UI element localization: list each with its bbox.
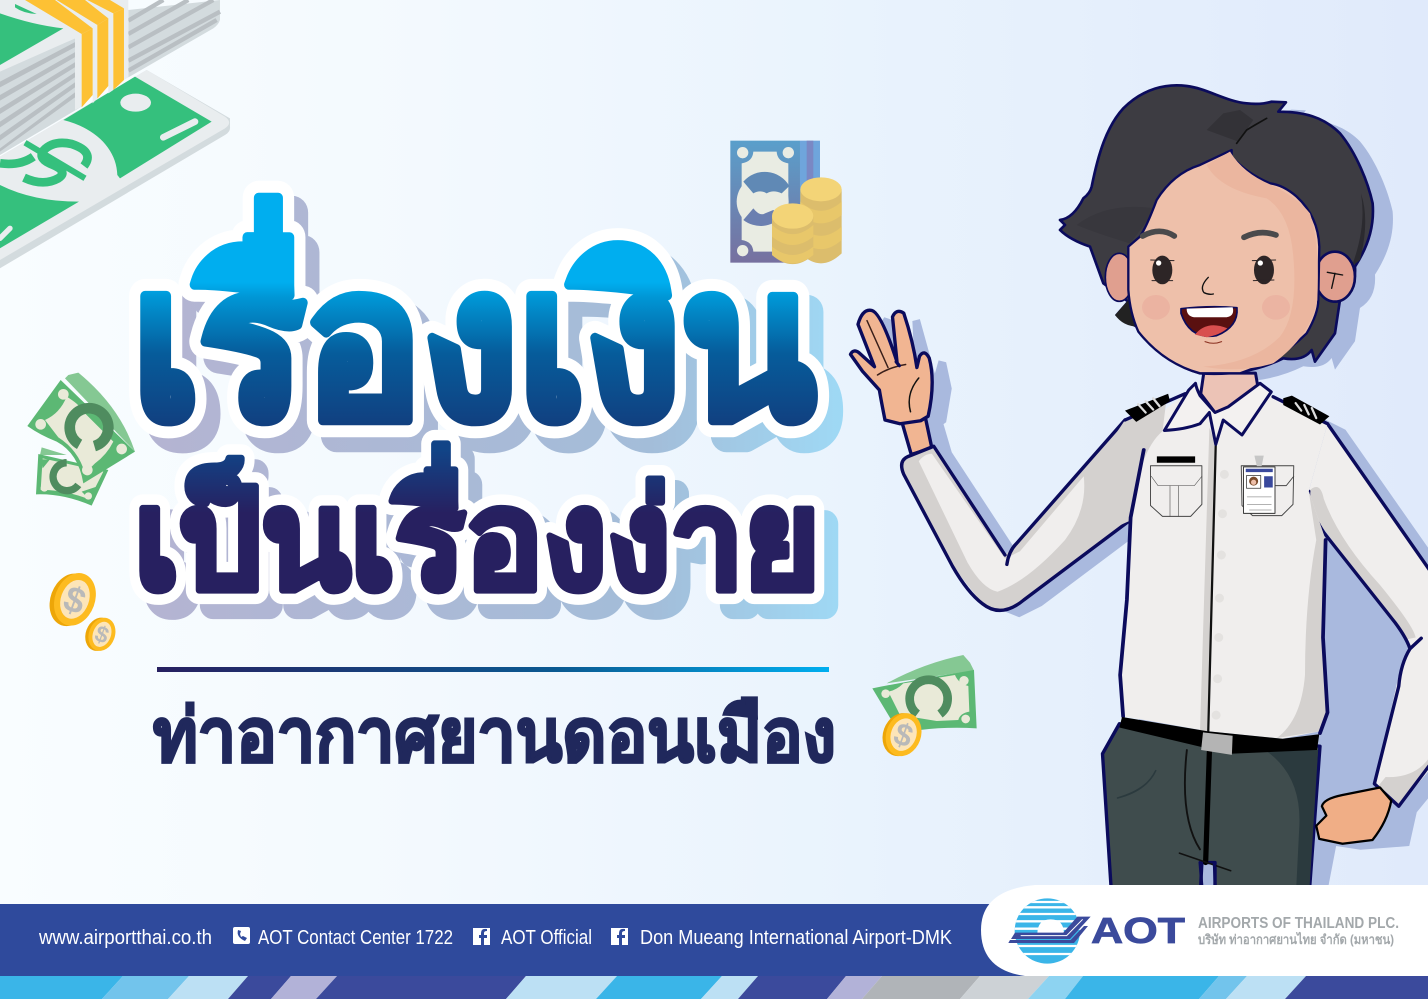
footer bar — [0, 904, 1428, 976]
left ear — [1105, 253, 1133, 301]
character shadow — [869, 93, 1428, 895]
upper banknote — [27, 373, 135, 483]
right arm and sleeve — [1309, 424, 1428, 806]
illustration: large gold coin — [42, 566, 103, 633]
neck — [1201, 373, 1258, 428]
illustration: green banknotes left — [27, 373, 135, 506]
illustration: small gold coin — [81, 613, 120, 656]
icon: facebook — [473, 928, 490, 945]
company name English: AIRPORTS OF THAILAND PLC. — [1198, 915, 1399, 932]
epaulettes — [1125, 394, 1329, 424]
nose — [1202, 277, 1213, 294]
AOT wordmark: AOT — [1091, 910, 1185, 951]
eyes — [1151, 256, 1276, 284]
illustration: AOT staff character — [850, 85, 1428, 900]
forehead shading — [1203, 152, 1318, 369]
logo panel — [981, 885, 1428, 976]
hair — [1060, 85, 1373, 374]
illustration: blue banknote with gold coins — [730, 141, 842, 264]
icon: phone — [233, 927, 250, 944]
banknote lying flat — [0, 70, 230, 268]
title line 2: เป็นเรื่องง่าย — [134, 443, 820, 618]
subtitle: ท่าอากาศยานดอนเมือง — [153, 694, 836, 777]
collar — [1164, 383, 1271, 444]
left pocket — [1150, 466, 1202, 516]
divider rule — [157, 667, 829, 672]
title line 2: เป็นเรื่องง่าย — [134, 443, 820, 618]
name badge — [1157, 456, 1195, 463]
illustration: stacked banknotes top left — [0, 0, 230, 268]
AOT globe emblem — [1008, 897, 1091, 967]
right ear — [1315, 252, 1355, 302]
airport page: Don Mueang International Airport-DMK — [640, 927, 953, 949]
AOT Official: AOT Official — [501, 927, 592, 949]
belt — [1119, 717, 1319, 755]
raised sleeve — [902, 412, 1140, 611]
body — [850, 310, 1428, 900]
blue banknote — [730, 141, 820, 263]
right pocket — [1241, 466, 1294, 516]
eyebrows — [1143, 231, 1276, 237]
trousers — [1102, 724, 1320, 900]
gold coin: $ — [889, 716, 918, 755]
head — [1060, 85, 1373, 374]
face — [1128, 150, 1319, 373]
raised hand — [850, 310, 932, 424]
lower hand — [1316, 788, 1391, 844]
lower banknote — [36, 447, 108, 506]
gold coin stacks — [772, 177, 842, 264]
title line 2: เป็นเรื่องง่าย — [148, 458, 834, 633]
raised forearm — [902, 418, 932, 454]
striped bottom band — [0, 976, 1428, 1000]
title line 1: เรื่องเงิน — [132, 197, 815, 462]
contact center: AOT Contact Center 1722 — [258, 927, 453, 949]
shirt — [1088, 384, 1328, 739]
title line 1: เรื่องเงิน — [132, 197, 815, 462]
icon: facebook — [611, 928, 628, 945]
cheeks — [1142, 295, 1290, 320]
mouth — [1181, 307, 1237, 343]
green banknote — [872, 655, 977, 730]
banknote stack — [0, 0, 220, 155]
company name Thai: บริษัท ท่าอากาศยานไทย จำกัด (มหาชน) — [1198, 931, 1394, 947]
buttons — [1212, 470, 1229, 720]
illustration: small gold coin: $ — [91, 620, 113, 649]
illustration: large gold coin: $ — [58, 577, 91, 623]
staff ID card — [1244, 456, 1275, 513]
illustration: green banknote with coin — [872, 655, 977, 762]
website: www.airportthai.co.th — [38, 927, 212, 949]
title line 1: เรื่องเงิน — [146, 212, 829, 477]
